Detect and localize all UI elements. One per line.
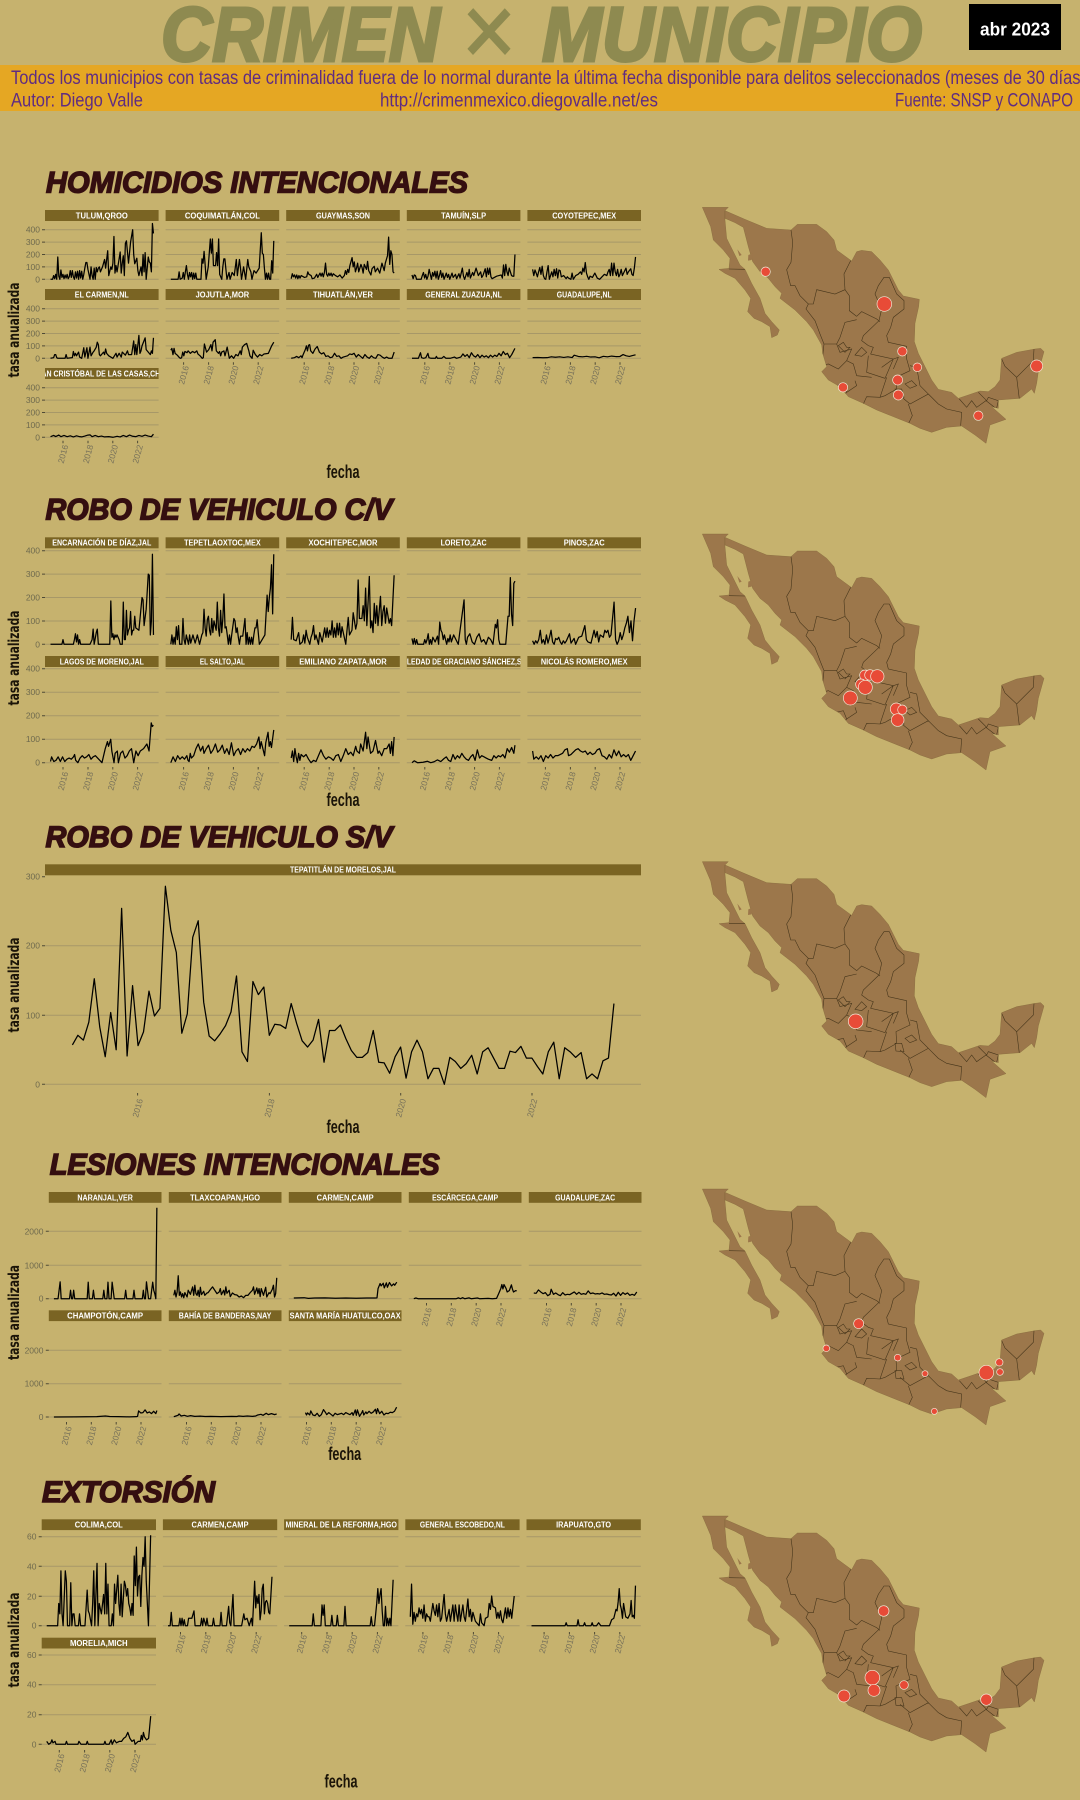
y axis title: tasa anualizada [5,282,23,378]
x axes: homicidios: 2018 [563,364,578,385]
y axis: extorsion: 40 [27,1561,37,1571]
panel: Mineral de la Reforma [284,1519,398,1626]
panel: Tulum [45,210,159,279]
y axis: lesiones: 1000 [25,1260,44,1270]
y axis: homicidios: 400 [26,304,40,314]
y axis: homicidios: 400 [26,383,40,393]
x axes: lesiones: 2020 [469,1306,484,1327]
panel: Carmen Camp [289,1192,402,1298]
y axis: homicidios: 400 [26,225,40,235]
x axes: lesiones: 2020 [589,1306,604,1327]
x axis: robo s/v [130,1093,539,1118]
panel: El Salto [166,656,279,763]
x axes: lesiones: 2016 [419,1306,434,1327]
panel: Morelia [42,1638,156,1744]
y axis: homicidios: 200 [26,328,40,338]
x axes: lesiones: 2018 [204,1425,219,1446]
x axes: lesiones: 2016 [539,1306,554,1327]
x axes: homicidios: 2022 [130,443,145,464]
x axes: robo c/v: 2020 [347,770,361,791]
x axes: homicidios: 2018 [201,364,216,385]
x axes: robo c/v: 2020 [106,770,120,791]
x axes: extorsion: 2020 [345,1633,360,1654]
x axes: lesiones: 2016 [179,1425,194,1446]
y axis: robo c/v: 200 [26,711,40,721]
y axis: homicidios: 300 [26,316,40,326]
x axes: homicidios: 2022 [492,364,507,385]
x axes: homicidios: 2018 [322,364,337,385]
y axis: lesiones: 2000 [25,1226,44,1236]
x axes: extorsion: 2022 [249,1633,264,1654]
x axes: lesiones: 2022 [494,1306,508,1327]
x axes: homicidios: 2016 [418,364,432,385]
y axis: robo c/v: 0 [35,639,40,649]
panel: Tepetlaoxtoc [166,537,279,644]
panel: Colima [42,1519,156,1626]
panel: El Carmen [45,289,159,358]
x axes: robo c/v: 2016 [418,770,432,791]
y axis: homicidios: 0 [35,274,40,284]
panel: San Cristobal [37,367,167,437]
x axes: robo c/v: 2022 [251,770,266,791]
x axes: lesiones: 2022 [134,1425,148,1446]
panel: General Escobedo [405,1519,520,1626]
y axis: extorsion: 0 [32,1621,37,1631]
x axes: robo c/v: 2018 [563,770,578,791]
x axis title: fecha [326,462,360,482]
date box: abr 2023 [980,20,1050,40]
x axes: robo c/v: 2022 [130,770,145,791]
panel: Coquimatlan [166,210,279,279]
panel: Jojutla [166,289,279,358]
panel: Loreto [407,537,520,644]
x axes: extorsion: 2016 [294,1633,309,1654]
y axis title: tasa anualizada [5,938,23,1032]
map: robo s/v [702,862,1044,1098]
x axes: robo c/v: 2022 [613,770,627,791]
date box [969,4,1061,50]
y axis: robo c/v: 0 [35,758,40,768]
y axis: extorsion: 60 [27,1532,37,1542]
y axis: lesiones: 0 [39,1294,44,1304]
x axes: extorsion: 2018 [77,1752,92,1773]
x axes: lesiones [59,1303,628,1446]
subtitle band: http://crimenmexico.diegovalle.net/es [380,90,658,112]
y axis: homicidios: 300 [26,237,40,247]
y axis: homicidios: 200 [26,408,40,418]
map: extorsion [702,1516,1044,1752]
y axis: robo c/v: 300 [26,569,40,579]
map: robo c/v [702,534,1044,770]
x axes: robo c/v: 2018 [81,770,95,791]
section heading: robo s/v: ROBO DE VEHICULO S/V [46,821,395,854]
x axes: robo c/v: 2020 [226,770,241,791]
x axes: robo c/v: 2018 [443,770,457,791]
x axis: robo s/v: 2016 [130,1097,145,1118]
y axis: homicidios [26,225,45,442]
x axes: homicidios: 2020 [467,364,482,385]
x axes: homicidios: 2016 [56,443,70,464]
x axis title: fecha [326,1117,360,1137]
y axis: lesiones: 0 [39,1412,44,1422]
y axis: extorsion: 20 [27,1710,37,1720]
x axes: extorsion: 2016 [52,1752,67,1773]
x axes: extorsion: 2022 [128,1752,142,1773]
y axis: lesiones: 2000 [25,1345,44,1355]
panel: Carmen Camp 2 [163,1519,277,1626]
x axes: lesiones: 2016 [299,1425,314,1446]
x axes: extorsion: 2016 [416,1633,430,1654]
panel: Guaymas [286,210,400,279]
y axis: extorsion: 0 [32,1739,37,1749]
panel: Soledad [397,656,530,763]
x axes: lesiones: 2018 [84,1425,99,1446]
x axes: lesiones: 2020 [109,1425,124,1446]
panel: General Zuazua [407,289,520,358]
panel: Tamuin [407,210,520,279]
y axis: extorsion: 40 [27,1680,37,1690]
y axis: extorsion [27,1532,42,1749]
y axis: robo s/v: 0 [35,1079,40,1089]
subtitle band: Autor: Diego Valle [11,90,143,112]
y axis: robo c/v [26,546,45,768]
x axes: extorsion: 2022 [370,1633,385,1654]
y axis title: tasa anualizada [5,1265,23,1360]
x axes: homicidios: 2016 [176,364,191,385]
x axes: homicidios: 2020 [588,364,603,385]
section heading: lesiones: LESIONES INTENCIONALES [50,1148,440,1182]
subtitle band [0,65,1080,112]
x axes: homicidios: 2022 [613,364,627,385]
x axes: lesiones: 2020 [349,1425,364,1446]
y axis: lesiones: 1000 [25,1379,44,1389]
panel: Tlaxcoapan [169,1192,282,1298]
x axes: homicidios: 2020 [226,364,241,385]
x axes: homicidios: 2020 [106,443,120,464]
y axis: homicidios: 300 [26,395,40,405]
panel: Guadalupe Zac [529,1192,642,1296]
x axes: homicidios: 2016 [297,364,312,385]
y axis: homicidios: 100 [26,341,40,351]
panel: Escarcega [409,1192,522,1299]
panel: Guadalupe NL [527,289,641,358]
x axis: robo s/v: 2020 [393,1097,408,1118]
y axis: robo c/v: 300 [26,687,40,697]
x axes: homicidios [56,362,627,464]
y axis: homicidios: 0 [35,432,40,442]
x axes: extorsion: 2016 [173,1633,188,1654]
title [161,0,922,87]
x axes: extorsion: 2018 [199,1633,213,1654]
x axes: robo c/v: 2018 [322,770,337,791]
section heading: homicidios: HOMICIDIOS INTENCIONALES [46,166,468,200]
panel: Xochitepec [286,537,400,644]
x axes: homicidios: 2022 [251,364,266,385]
x axes: robo c/v: 2022 [372,770,386,791]
x axes: extorsion: 2020 [103,1752,117,1773]
panel: Champoton [49,1310,161,1417]
y axis: extorsion: 60 [27,1650,37,1660]
y axis: lesiones [25,1226,49,1422]
y axis: homicidios: 0 [35,353,40,363]
panel: Coyotepec [527,210,641,279]
y axis: robo s/v: 300 [26,872,40,882]
x axes: lesiones: 2018 [444,1306,459,1327]
y axis: robo s/v: 200 [26,941,40,951]
x axis title: fecha [324,1772,358,1792]
y axis: robo s/v [26,872,45,1089]
y axis: extorsion: 20 [27,1591,37,1601]
x axes: extorsion: 2018 [562,1633,577,1654]
x axes: robo c/v: 2016 [297,770,312,791]
panel: Tepatitlan de Morelos: TEPATITLÁN DE MORELOS,JAL [290,865,396,875]
x axes: robo c/v: 2022 [492,770,507,791]
x axes: extorsion: 2020 [224,1633,238,1654]
x axis title: fecha [328,1444,362,1464]
y axis: homicidios: 200 [26,250,40,260]
panel: Encarnacion de Diaz [45,537,159,644]
x axes: lesiones: 2018 [324,1425,339,1446]
panel: Bahia de Banderas [169,1310,282,1417]
panel: Lagos de Moreno [45,656,159,763]
x axes: extorsion [52,1632,627,1773]
x axes: robo c/v: 2016 [538,770,553,791]
x axes: lesiones: 2022 [614,1306,628,1327]
x axes: lesiones: 2018 [564,1306,579,1327]
panel: Naranjal [49,1192,161,1299]
x axes: lesiones: 2020 [229,1425,244,1446]
x axis title: fecha [326,790,360,810]
y axis: robo c/v: 100 [26,616,40,626]
x axes: lesiones: 2016 [59,1425,74,1446]
panel: Tepatitlan de Morelos [45,864,641,1084]
x axes: homicidios: 2020 [347,364,361,385]
x axes: homicidios: 2018 [443,364,457,385]
x axes: homicidios: 2022 [372,364,386,385]
y axis: robo c/v: 400 [26,546,40,556]
x axes: extorsion: 2018 [320,1633,334,1654]
x axes: robo c/v: 2016 [56,770,70,791]
map: homicidios [702,207,1044,443]
x axis: robo s/v: 2022 [525,1097,539,1118]
x axes: extorsion: 2020 [466,1633,481,1654]
x axes: robo c/v: 2020 [467,770,482,791]
panel: Santa Maria Huatulco [289,1310,402,1416]
y axis: homicidios: 100 [26,262,40,272]
section heading: robo c/v: ROBO DE VEHICULO C/V [46,494,395,526]
x axes: homicidios: 2016 [538,364,553,385]
x axes: extorsion: 2022 [491,1633,506,1654]
panel: Tihuatlan [286,289,400,358]
x axes: homicidios: 2018 [81,443,95,464]
x axes: extorsion: 2020 [587,1633,602,1654]
y axis: robo c/v: 400 [26,664,40,674]
x axis: robo s/v: 2018 [262,1097,277,1118]
panel: Nicolas Romero [527,656,641,762]
x axes: lesiones: 2022 [254,1425,268,1446]
y axis: robo s/v: 100 [26,1010,40,1020]
x axes: extorsion: 2016 [537,1633,551,1654]
y axis: robo c/v: 100 [26,734,40,744]
map: lesiones [702,1189,1044,1425]
x axes: robo c/v [56,767,627,791]
x axes: robo c/v: 2016 [176,770,191,791]
y axis: homicidios: 100 [26,420,40,430]
panel: Emiliano Zapata [286,656,400,763]
panel: Pinos [527,537,641,644]
x axes: extorsion: 2022 [613,1633,627,1654]
y axis title: tasa anualizada [5,610,23,706]
section heading: extorsion: EXTORSIÓN [42,1475,216,1509]
y axis: robo c/v: 200 [26,592,40,602]
y axis title: tasa anualizada [5,1592,23,1688]
x axes: robo c/v: 2020 [588,770,603,791]
x axes: lesiones: 2022 [374,1425,388,1446]
x axes: robo c/v: 2018 [201,770,216,791]
x axes: extorsion: 2018 [441,1633,456,1654]
panel: Irapuato [526,1519,641,1626]
